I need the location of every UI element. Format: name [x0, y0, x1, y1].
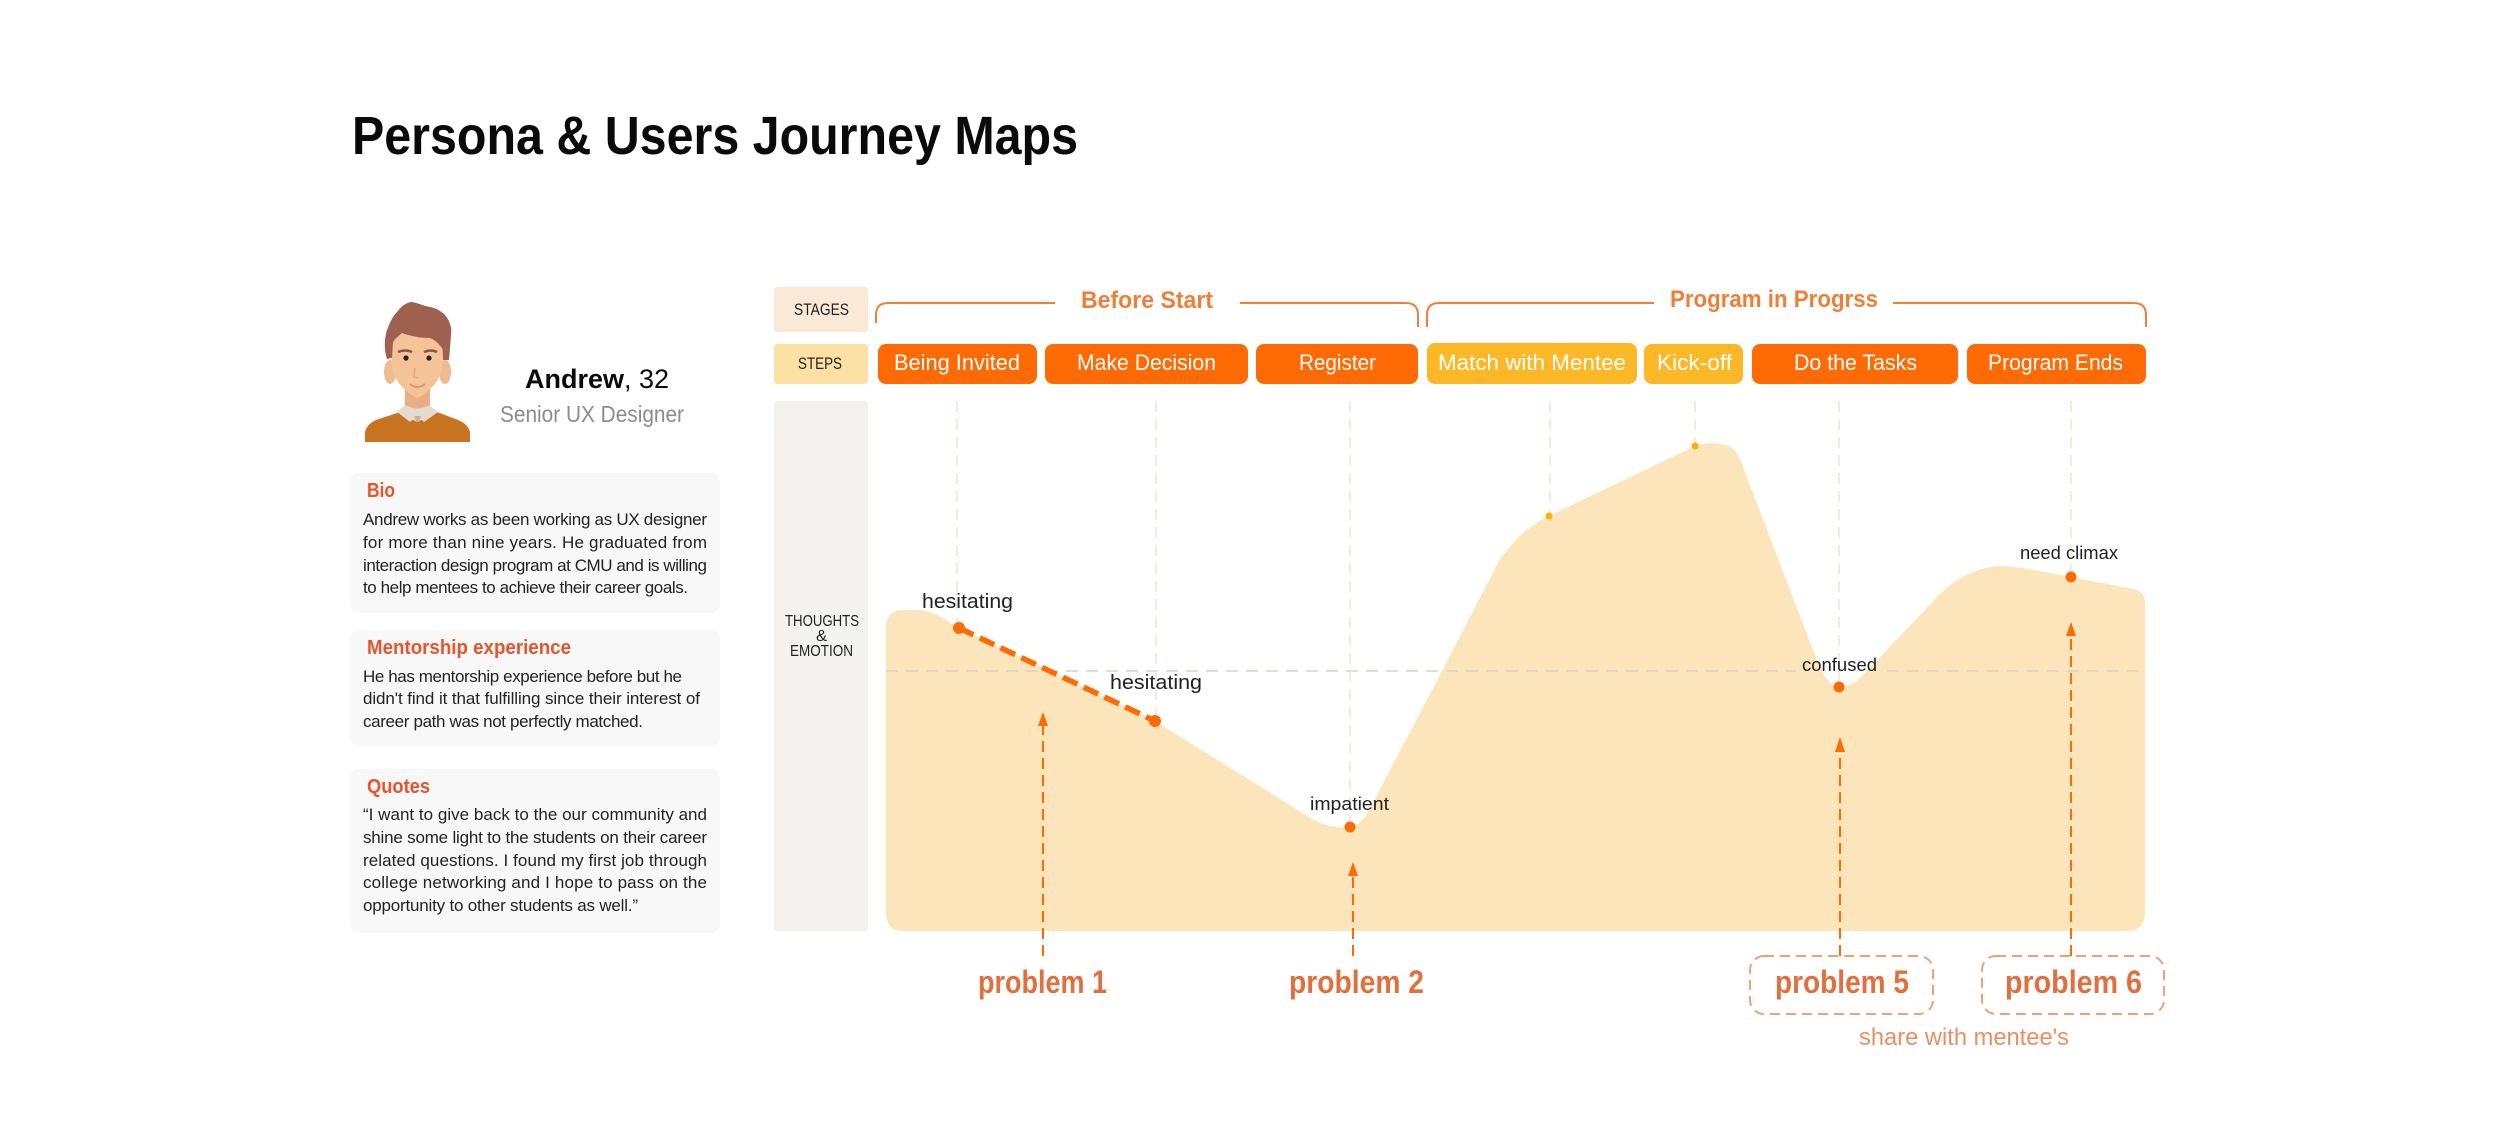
emotion point: impatient: impatient — [1310, 794, 1389, 814]
emotion point: need climax: need climax — [2020, 543, 2118, 563]
emotion point: match with mentee — [1546, 512, 1552, 520]
arrow: problem 2 — [1348, 862, 1358, 956]
mentorship text: didn't find it that fulfilling since their interest of — [363, 689, 700, 708]
title: Persona & Users Journey Maps — [352, 106, 1078, 166]
persona role: Senior UX Designer — [500, 401, 684, 427]
quotes text — [363, 805, 707, 915]
quotes heading: Quotes — [367, 776, 430, 798]
callout: problem 6 — [1982, 956, 2164, 1014]
row label: thoughts and emotion: & — [816, 628, 827, 645]
callout: problem 5: problem 5 — [1775, 964, 1909, 1000]
quotes text: shine some light to the students on their career — [363, 828, 707, 847]
row label: thoughts and emotion: THOUGHTS — [785, 613, 859, 630]
mentorship heading: Mentorship experience — [367, 637, 571, 659]
mentorship text — [363, 667, 700, 731]
row label: stages: STAGES — [794, 300, 849, 319]
emotion point: confused: confused — [1802, 655, 1877, 675]
step: match with mentee — [1427, 343, 1637, 384]
quotes text: opportunity to other students as well.” — [363, 896, 638, 915]
row label: thoughts and emotion — [774, 401, 868, 931]
label: problem 2: problem 2 — [1289, 964, 1424, 1000]
step: register — [1256, 344, 1418, 384]
quotes text: “I want to give back to the our community and — [363, 805, 707, 824]
step: match with mentee: Match with Mentee — [1438, 350, 1626, 375]
step: make decision — [1045, 344, 1248, 384]
bio text: interaction design program at CMU and is willing — [363, 556, 707, 575]
mentorship text: He has mentorship experience before but he — [363, 667, 682, 686]
stage bracket: before start — [876, 287, 1418, 327]
quotes text: related questions. I found my first job through — [363, 851, 707, 870]
bio text — [363, 510, 707, 597]
note: share with mentee's: share with mentee's — [1859, 1024, 2069, 1051]
step: do the tasks: Do the Tasks — [1794, 350, 1917, 375]
emotion point: impatient — [1310, 794, 1389, 832]
bio text: to help mentees to achieve their career goals. — [363, 578, 688, 597]
arrow: problem 1 — [1038, 712, 1048, 956]
bio text: Andrew works as been working as UX designer — [363, 510, 707, 529]
row label: stages — [774, 287, 868, 332]
emotion point: kick-off — [1692, 442, 1698, 450]
panel: persona identity — [365, 302, 684, 442]
emotion point: confused — [1802, 655, 1877, 692]
callout: problem 5 — [1750, 956, 1933, 1014]
row label: steps: STEPS — [798, 354, 842, 373]
step: being invited: Being Invited — [894, 350, 1020, 375]
emotion point: hesitating 2: hesitating — [1110, 672, 1202, 694]
stage bracket: before start: Before Start — [1081, 287, 1213, 314]
emotion point: need climax — [2020, 543, 2118, 582]
row label: thoughts and emotion: EMOTION — [790, 643, 853, 660]
arrow: problem 6 — [2066, 622, 2076, 956]
step: kick-off: Kick-off — [1657, 350, 1733, 375]
row label: steps — [774, 344, 868, 384]
neutral baseline — [886, 670, 2145, 672]
step: do the tasks — [1752, 344, 1958, 384]
step: program ends: Program Ends — [1988, 350, 2123, 375]
arrow: problem 5 — [1835, 737, 1845, 956]
bio text: for more than nine years. He graduated from — [363, 533, 707, 552]
dashed segment between hesitating points — [959, 628, 1155, 721]
callout: problem 6: problem 6 — [2005, 964, 2142, 1000]
panel: mentorship experience — [350, 630, 720, 746]
emotion point: hesitating 1: hesitating — [922, 591, 1013, 613]
panel: bio — [350, 473, 720, 613]
emotion point: hesitating 2 — [1110, 672, 1202, 727]
step: being invited — [878, 344, 1037, 384]
stage bracket: program in progress: Program in Progrss — [1670, 286, 1878, 313]
step guide lines — [957, 401, 2071, 827]
step: kick-off — [1644, 344, 1743, 384]
quotes text: college networking and I hope to pass on the — [363, 873, 707, 892]
step: program ends — [1967, 344, 2146, 384]
panel: quotes — [350, 769, 720, 933]
chart: emotion journey area — [886, 401, 2145, 931]
label: problem 1: problem 1 — [978, 964, 1107, 1000]
stage bracket: program in progress — [1427, 286, 2146, 327]
bio heading: Bio — [367, 480, 395, 502]
emotion point: hesitating 1 — [922, 591, 1013, 634]
icon: avatar of Andrew — [365, 302, 470, 442]
persona name: Andrew, 32 — [525, 364, 669, 394]
step: register: Register — [1299, 350, 1376, 375]
step: make decision: Make Decision — [1077, 350, 1216, 375]
mentorship text: career path was not perfectly matched. — [363, 712, 643, 731]
